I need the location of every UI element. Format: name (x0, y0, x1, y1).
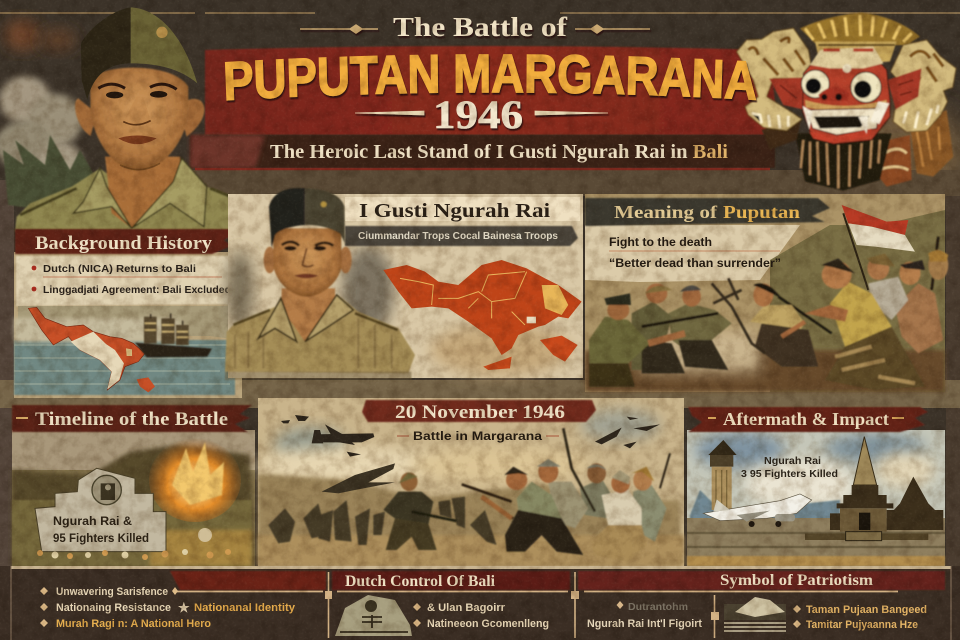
text: definition (609, 237, 781, 270)
text: airport note (587, 601, 702, 630)
list: legacy values: ★ (178, 600, 190, 615)
text: airport note: Dutrantohm (628, 602, 688, 613)
illustration: control tower (708, 440, 737, 510)
text: memorial inscription (53, 514, 149, 545)
banner: meaning of puputan: Meaning of (614, 202, 718, 222)
illustration: temple (805, 437, 943, 541)
text: definition: “Better dead than surrender” (609, 258, 781, 270)
list: background facts (32, 263, 231, 296)
illustration: aircraft (281, 415, 660, 493)
cap (81, 7, 197, 170)
band: right red (578, 571, 945, 590)
portrait: large soldier (15, 7, 270, 232)
icon: Indonesian flag (842, 205, 915, 290)
banner: aftermath and impact (688, 407, 928, 432)
panel: title banner (188, 12, 957, 192)
icon: memorial relief (724, 597, 786, 631)
text: battle in Margarana: Battle in Margarana (413, 431, 543, 443)
illustration: flowers (37, 528, 231, 560)
list: legacy values (40, 586, 296, 630)
icon: monument (335, 595, 412, 636)
list: Dutch control: & Ulan Bagoirr (427, 602, 506, 614)
panel: I Gusti Ngurah Rai (225, 188, 583, 380)
text: airport caption (741, 455, 838, 480)
eyes (801, 70, 829, 98)
heading: symbol of patriotism: Symbol of Patriotism (720, 572, 873, 589)
map: Bali regions (383, 260, 582, 370)
heading: The Battle of (300, 12, 650, 42)
heading: 1946: 1946 (433, 92, 523, 137)
list: patriotism (793, 604, 927, 631)
illustration: airliner (703, 494, 812, 527)
panel: 20 November 1946 (255, 398, 684, 566)
list: legacy values: Nationaing Resistance (56, 602, 171, 614)
portrait: soldier (225, 188, 415, 380)
banner: timeline of the battle (12, 405, 252, 432)
band: left red (170, 571, 326, 590)
list: legacy values: Murah Ragi n: A National Hero (56, 618, 211, 630)
banner: aftermath and impact: Aftermath & Impact (723, 409, 889, 429)
panel: background history (14, 229, 250, 398)
face (803, 50, 890, 144)
crown (800, 13, 920, 47)
caption: Ciummandar Trops Cocal Bainesa Troops (358, 231, 558, 242)
illustration: fighters (589, 237, 948, 390)
ears (769, 77, 804, 109)
ornaments (737, 28, 813, 131)
list: legacy values: Unwavering Sarisfence (56, 586, 168, 598)
text: memorial inscription: 95 Fighters Killed (53, 531, 149, 545)
list: background facts: Linggadjati Agreement: Bali Excluded (43, 284, 231, 296)
text: definition: Fight to the death (609, 237, 712, 249)
icon: warship (135, 313, 212, 357)
heading: The Battle of: The Battle of (393, 12, 568, 42)
list: Dutch control: Natineeon Gcomenlleng (427, 618, 549, 630)
band: center red (332, 571, 570, 590)
illustration: front fighters (462, 428, 670, 562)
barong mask (737, 13, 956, 191)
banner: meaning of puputan (585, 198, 830, 226)
panel: aftermath and impact (687, 407, 945, 566)
banner: timeline of the battle: Timeline of the Battle (35, 410, 228, 430)
banner: background history (15, 229, 238, 254)
illustration: distant fighters (268, 497, 497, 545)
heading: Dutch control of Bali: Dutch Control Of Bali (345, 573, 496, 590)
list: legacy values: Nationanal Identity (194, 602, 296, 614)
heading: 1946 (355, 92, 608, 137)
panel: bottom strip (0, 566, 960, 640)
map: small Bali (28, 307, 155, 392)
illustration: central soldier (383, 472, 457, 550)
list: Dutch control (413, 602, 549, 630)
illustration: fire (149, 438, 241, 522)
band: name plate (345, 197, 580, 221)
text: memorial inscription: Ngurah Rai & (53, 514, 132, 528)
list: patriotism: Tamitar Pujyaanna Hze (806, 619, 918, 631)
illustration: memorial stone (35, 468, 166, 552)
band: dark caption (345, 226, 578, 246)
text: airport caption: 3 95 Fighters Killed (741, 468, 838, 480)
banner: date (362, 400, 596, 423)
subtitle: The Heroic Last Stand of I Gusti Ngurah Rai in Bali (270, 142, 729, 163)
nose (818, 87, 849, 101)
banner: date: 20 November 1946 (395, 403, 565, 423)
panel: timeline of the battle (12, 405, 255, 566)
text: airport caption: Ngurah Rai (764, 455, 821, 467)
banner: meaning of puputan: Puputan (723, 202, 800, 222)
heading: name: I Gusti Ngurah Rai (359, 200, 551, 222)
list: patriotism: Taman Pujaan Bangeed (806, 604, 927, 616)
list: background facts: Dutch (NICA) Returns to Bali (43, 263, 196, 275)
heading: Puputan Margarana: PUPUTAN MARGARANA (224, 54, 758, 104)
text: airport note: Ngurah Rai Int'l Figoirt (587, 618, 702, 630)
banner: background history: Background History (35, 233, 213, 254)
panel: meaning of puputan (585, 194, 948, 392)
